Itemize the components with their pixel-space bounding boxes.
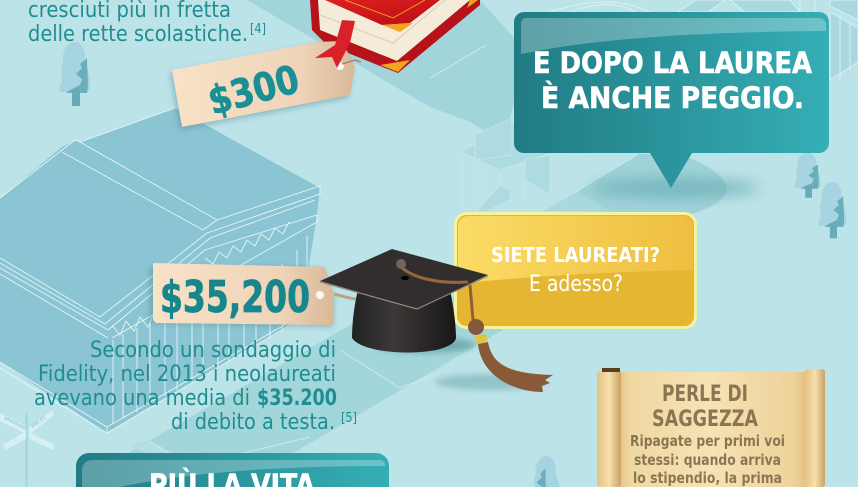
cap tassel <box>468 285 553 392</box>
price tag: $300 <box>170 20 361 130</box>
paragraph: Fidelity survey: Secondo un sondaggio di <box>90 338 336 363</box>
icon: street sign: BROADWAY <box>4 415 29 432</box>
background building: small booth <box>461 118 560 215</box>
intro text <box>28 0 266 47</box>
paragraph: Fidelity survey: $35.200 <box>257 386 337 411</box>
paragraph: Fidelity survey: di debito a testa. <box>171 410 335 435</box>
tree: bottom <box>532 456 560 487</box>
callout box: Siete laureati? <box>456 214 696 328</box>
scroll body: lo stipendio, la prima <box>633 469 782 487</box>
background building: top right city blocks <box>550 0 858 80</box>
callout bubble: E dopo la laurea: È ANCHE PEGGIO. <box>541 81 804 115</box>
scroll body: Ripagate per primi voi <box>630 432 785 450</box>
intro text: [4] <box>250 22 266 37</box>
icon: street sign: 2ND ST. <box>30 414 47 429</box>
price tag: $35,200 <box>150 263 334 327</box>
price tag: $35,200: $35,200 <box>160 272 310 323</box>
scroll body <box>630 432 785 487</box>
callout bubble: E dopo la laurea: E DOPO LA LAUREA <box>533 46 812 80</box>
price tag: $300: $300 <box>204 57 304 125</box>
icon: red book <box>310 0 480 73</box>
scroll body: stessi: quando arriva <box>634 451 781 469</box>
paragraph: Fidelity survey: Fidelity, nel 2013 i neolaureati <box>38 362 336 387</box>
callout bubble: Più la vita <box>76 453 389 487</box>
bubble ground shadow <box>590 178 760 198</box>
tree: right upper <box>794 153 821 198</box>
panel: parchment scroll <box>597 368 825 487</box>
callout bubble: E dopo la laurea <box>514 12 829 188</box>
icon: graduation cap <box>320 249 553 392</box>
callout box: Siete laureati?: E adesso? <box>529 272 623 297</box>
icon: street sign <box>0 410 55 487</box>
intro text: delle rette scolastiche. <box>28 22 248 47</box>
panel: parchment scroll: SAGGEZZA <box>652 407 758 432</box>
paragraph: Fidelity survey: avevano una media di <box>34 386 250 411</box>
tree: right lower <box>818 182 846 238</box>
paragraph: Fidelity survey <box>34 338 357 435</box>
building: library with columns <box>0 108 320 433</box>
callout box: Siete laureati?: SIETE LAUREATI? <box>491 243 660 267</box>
icon: ribbon bookmark <box>315 20 355 68</box>
tree: left <box>59 42 90 106</box>
paragraph: Fidelity survey: [5] <box>341 411 357 426</box>
scroll heading: PERLE DI <box>662 382 748 407</box>
